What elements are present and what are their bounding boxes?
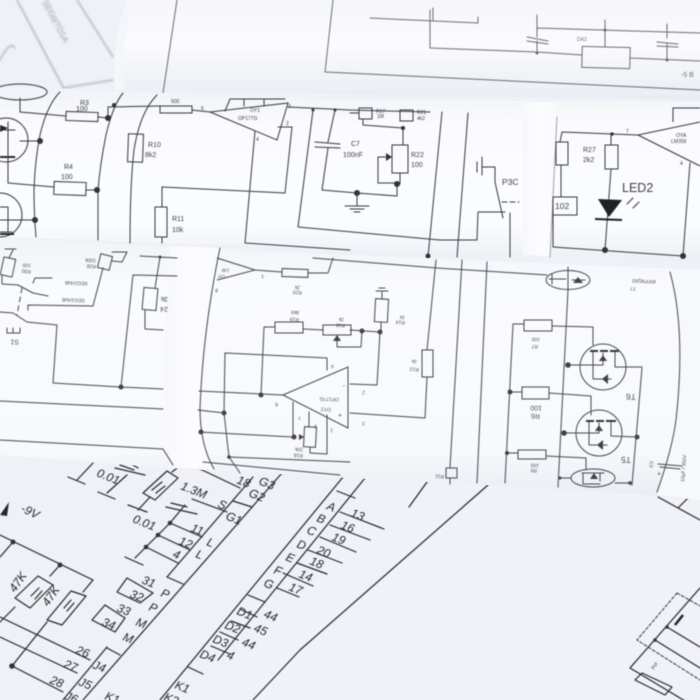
resistors 47K: 47K [6, 568, 30, 595]
block labelled 102 [553, 197, 577, 215]
resistors R7 R6 R5: R6 [531, 412, 540, 419]
label -5 V: -5 B [681, 72, 694, 79]
second connector labels: K1 [173, 678, 192, 696]
lower right schematic: Pot [651, 661, 660, 671]
resistors R7 R6 R5: R7 [531, 343, 538, 349]
resistors R7 R6 R5: R5 [530, 467, 537, 473]
second connector labels: G [262, 576, 276, 592]
second connector lines [211, 512, 384, 654]
resistors R17 and R21: 1M [377, 114, 384, 120]
capacitor and resistor group [68, 463, 227, 565]
op amp OP177G: 6 [201, 106, 204, 112]
resistor R10: 8k2 [145, 152, 156, 159]
connector numbers: 28 [47, 672, 66, 691]
trimmer R15: 2k [338, 316, 344, 322]
transistor T6 [565, 344, 642, 402]
connector numbers: 27 [61, 656, 81, 675]
second connector labels: 20 [314, 542, 333, 561]
resistor R27 [583, 145, 618, 169]
resistors R17 and R21: 4k2 [417, 116, 425, 122]
capacitor C7: 100nF [343, 152, 363, 159]
resistor R24: 3k [160, 295, 168, 302]
transistor T6: T6 [626, 392, 636, 402]
paper joint strip [523, 103, 557, 256]
second connector labels: A [324, 498, 338, 515]
trimmer R15: R15 [335, 322, 345, 328]
op amp OP177G: 3 [288, 104, 291, 110]
trimmer R22: R22 [411, 152, 424, 159]
resistor R10 [128, 134, 161, 162]
LED2 [595, 181, 653, 220]
second connector labels: D [295, 537, 308, 553]
connector numbers: 18 [235, 473, 253, 491]
buses [450, 260, 487, 483]
capacitor C7 [315, 141, 363, 159]
op amp OP177G inverted [275, 363, 348, 433]
resistors 47K: 47K [39, 582, 63, 609]
resistors R7 R6 R5: 100 [530, 462, 539, 468]
right half wiring [200, 248, 220, 469]
resistor R13 [350, 260, 436, 418]
resistor R4: R4 [64, 164, 73, 171]
right edge curve and capacitor C3 [647, 272, 688, 492]
right edge curve and capacitor C3: + [657, 471, 661, 478]
right edge curve and capacitor C3: 10µF / 350V [680, 454, 688, 482]
resistor R14 [350, 288, 405, 385]
panel: front paper roll: 2 [362, 389, 365, 395]
op amp LM358: LM358 [671, 139, 687, 145]
panel: front paper roll: 3 [362, 420, 365, 426]
resistor R3 [66, 100, 98, 122]
resistors R17 and R21: R17 [376, 109, 385, 115]
panel: top paper roll [114, 0, 700, 100]
op amp OP177G: 2 [286, 121, 289, 127]
connector numbers: 32 [128, 587, 146, 605]
connector numbers: 34 [100, 615, 118, 633]
op amp OP177G inverted: 4 [331, 363, 334, 369]
resistor R28: 100k [84, 256, 96, 263]
second connector labels: 45 [252, 621, 270, 639]
right edge curve and capacitor C3: C3 [647, 461, 654, 468]
connector numbers: 4 [171, 547, 183, 562]
connector letters: P [147, 600, 160, 616]
transistor T7: IRFP9Q00 [632, 277, 656, 284]
resistor top [160, 99, 192, 113]
resistor R10: R10 [148, 142, 161, 149]
second connector labels: 13 [349, 506, 367, 524]
capacitor C7: C7 [351, 141, 360, 148]
connector numbers: S [216, 497, 229, 513]
connector numbers: 11 [189, 521, 206, 538]
connector numbers: 12 [177, 534, 195, 552]
capacitor and resistor group: 0.01 [131, 512, 158, 534]
op amp OP177G inverted: 1 [330, 427, 333, 433]
resistor R4 [54, 164, 86, 196]
second connector labels: 19 [330, 530, 348, 548]
LED2: LED2 [622, 181, 653, 195]
resistor R3: R3 [80, 100, 89, 107]
connector letters: G2 [247, 486, 267, 505]
label DA2: DA2 [577, 37, 587, 43]
connector numbers [47, 473, 253, 691]
second connector labels: D3 [211, 632, 231, 651]
op amp OP177G inverted: OP177G [319, 395, 339, 402]
second connector labels [103, 498, 367, 700]
second connector labels: 4 [225, 648, 237, 663]
trimmer R16: 20k [294, 446, 303, 452]
op amp LM358: 4 [680, 161, 683, 167]
right circuit wiring [553, 132, 690, 256]
second connector labels: E [284, 550, 297, 566]
resistor R27: 2k2 [583, 157, 594, 164]
connector letters: M [134, 615, 148, 632]
panel: bottom flat sheet [0, 450, 700, 700]
resistors R17 and R21 [350, 108, 426, 128]
switch P3C: P3C [502, 177, 519, 187]
connector rails [63, 473, 365, 700]
resistor R14: R14 [395, 319, 405, 325]
connector letters: G1 [224, 509, 244, 528]
block labelled 102: 102 [555, 201, 569, 211]
left switch wiring [2, 250, 127, 310]
resistor R11 small [435, 468, 457, 484]
op amp OP177G: OP177G [238, 116, 258, 122]
op amp OP177G inverted: 6 [275, 401, 278, 407]
resistors 47K [6, 568, 86, 625]
resistor R4: 100 [61, 174, 73, 181]
connector letters: G3 [257, 474, 277, 493]
resistor R28 [84, 254, 113, 270]
connector letters: L [194, 547, 205, 562]
trimmer R16 [293, 412, 327, 458]
label S1: S1 [10, 338, 19, 345]
second connector labels: 18 [308, 554, 326, 572]
resistors R7 R6 R5: 100 [531, 336, 540, 342]
DA2 block [582, 46, 630, 69]
transistor T5 [561, 410, 640, 465]
resistors R7 R6 R5: 100 [530, 404, 542, 411]
numbered boxes [92, 578, 153, 632]
transistor lower [558, 469, 632, 487]
trimmer R22: 100 [411, 162, 423, 169]
resistor R28: R28 [86, 263, 96, 269]
connector numbers: 26 [73, 642, 92, 661]
connector numbers: 31 [140, 573, 158, 591]
lower right schematic [630, 497, 700, 700]
op amp OP177G [201, 99, 291, 143]
buses [34, 92, 157, 243]
connector letters: L [205, 535, 216, 550]
ground symbol [345, 193, 369, 212]
resistor R20: R20 [292, 289, 302, 295]
resistor R11 small: R11 [435, 473, 444, 479]
op amp LM358 [626, 108, 700, 167]
second connector labels: D4 [198, 647, 218, 666]
op amp LM358 inverted: 8 [215, 287, 218, 293]
panel: front paper roll [0, 238, 700, 500]
resistor R30: 100 [22, 262, 31, 268]
second connector labels: F [272, 563, 285, 579]
resistor R3: 100 [76, 106, 88, 113]
op amp OP177G inverted: OY2 [321, 406, 331, 412]
second connector labels: D2 [223, 618, 243, 637]
op amp OP177G inverted: 7 [298, 414, 301, 420]
label SEG3/4d6: SEG3/4d6 [62, 296, 85, 303]
resistor R27: R27 [583, 147, 596, 154]
capacitor and resistor group: 1.3M [179, 479, 209, 502]
op amp LM358 inverted [215, 258, 264, 293]
second connector labels: B [315, 511, 328, 527]
resistor R30 [0, 257, 31, 277]
long diagonal lines [253, 482, 488, 700]
transistor T7: T7 [630, 285, 636, 291]
second connector labels: 16 [339, 518, 357, 536]
connector letters: M [121, 630, 135, 647]
op amp OP177G inverted: 8 [314, 423, 317, 429]
resistor R13: R13 [409, 366, 419, 372]
resistor R20 [282, 269, 308, 295]
panel: middle paper roll [0, 84, 700, 262]
trimmer R22 [378, 128, 424, 184]
transistor T5: T5 [621, 455, 631, 465]
resistors R17 and R21: R21 [417, 110, 426, 116]
second connector labels: D1 [235, 604, 254, 623]
connector letters: J4 [90, 657, 108, 676]
transistors left [0, 84, 47, 237]
op amp LM358 inverted: OY [217, 273, 225, 279]
connector letters [62, 474, 277, 700]
op amp LM358: 7 [626, 129, 629, 135]
connector letters: P [159, 586, 172, 602]
op amp OP177G inverted: + [338, 411, 342, 418]
op amp OP177G: OY1 [250, 108, 260, 114]
second connector labels: 17 [287, 580, 306, 598]
switch P3C [477, 157, 519, 257]
label SEG2/4d6: SEG2/4d6 [65, 279, 88, 286]
connector letters: J5 [76, 674, 94, 693]
resistor R13: 1k [411, 358, 417, 364]
resistor R20: 2k [294, 284, 300, 290]
resistor R30: R30 [21, 268, 31, 274]
op amp OP177G: 4 [256, 137, 259, 143]
label -9V: -9V [19, 501, 43, 522]
op amp LM358 inverted: 1 [261, 273, 264, 279]
second connector labels: 44 [240, 635, 258, 653]
op amp OP177G inverted: - [342, 382, 345, 389]
resistor R19: R19 [289, 316, 299, 322]
second connector labels: 44 [262, 607, 280, 625]
resistor R11 [155, 207, 184, 237]
resistor R24 [142, 287, 168, 312]
resistor R24: 24 [160, 305, 168, 312]
second connector labels: 14 [297, 567, 315, 585]
resistor top: 500 [171, 99, 180, 105]
trimmer R16: R16 [293, 452, 303, 458]
resistor R19: 8k5 [291, 309, 299, 315]
resistor R14: 1k [399, 314, 405, 320]
resistor R11: R11 [172, 216, 184, 223]
connector numbers: 33 [115, 601, 133, 619]
second connector labels: C [305, 523, 318, 539]
capacitor and resistor group: 0.01 [95, 466, 122, 488]
op amp LM358 inverted: LM [222, 267, 229, 273]
transistor T7 [546, 267, 656, 487]
trimmer R15 [323, 316, 351, 341]
resistors R7 R6 R5 [505, 320, 593, 483]
resistor [556, 142, 568, 165]
left wiring [0, 468, 240, 692]
resistor R19 [275, 309, 303, 333]
op amp LM358: OYA [676, 133, 687, 139]
resistor R11: 10k [172, 227, 184, 234]
